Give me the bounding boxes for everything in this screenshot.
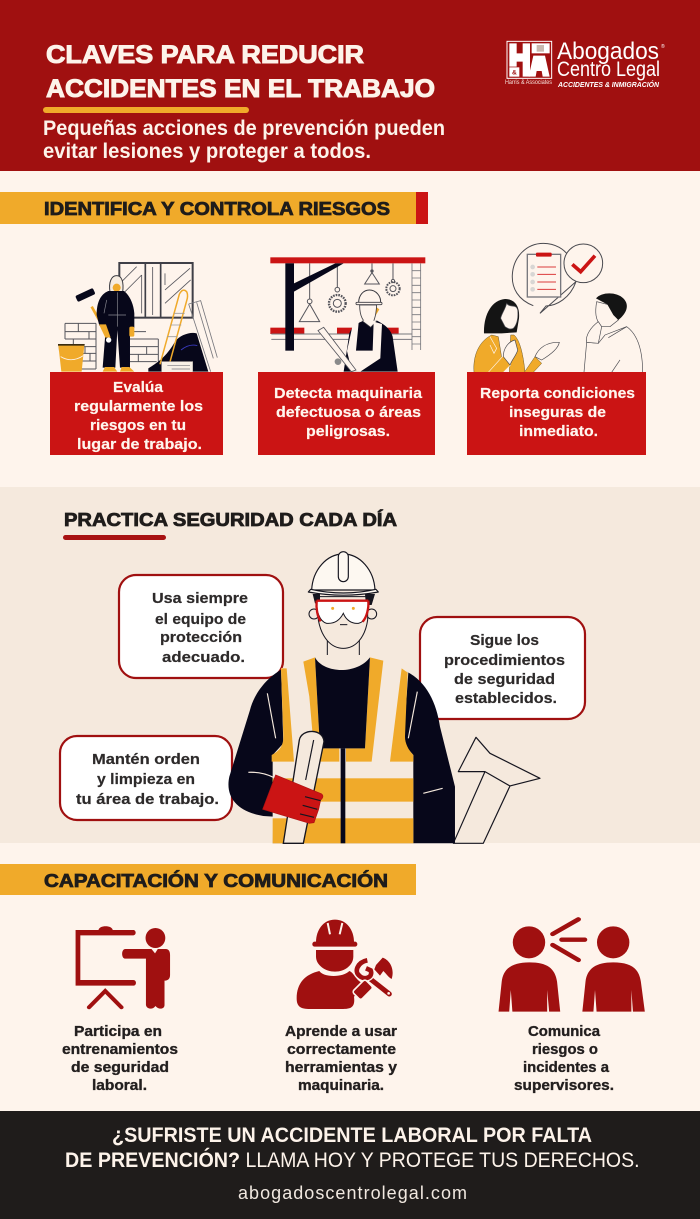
text: entrenamientos: laboral. xyxy=(92,1078,147,1094)
section 1 heading bar xyxy=(0,192,428,224)
text: herramientas: maquinaria. xyxy=(298,1078,384,1094)
logo: & xyxy=(512,69,517,76)
text: entrenamientos xyxy=(62,1024,178,1094)
subtitle: Pequeñas acciones de prevención pueden xyxy=(43,117,445,140)
text: comunica riesgos xyxy=(514,1024,614,1094)
panel: practica seguridad xyxy=(0,487,700,843)
callout: equipo de protección: protección xyxy=(160,629,242,646)
callout: equipo de protección xyxy=(119,575,283,678)
card: evalúa riesgos: lugar de trabajo. xyxy=(77,436,202,453)
callout: procedimientos: establecidos. xyxy=(455,690,557,707)
card: evalúa riesgos: Evalúa xyxy=(113,379,164,396)
illustration: two colleagues talking about a checklist xyxy=(474,243,643,372)
card: evalúa riesgos xyxy=(50,372,223,455)
logo: ACCIDENTES & INMIGRACIÓN xyxy=(557,80,660,89)
card: reporta condiciones: inmediato. xyxy=(519,423,598,440)
red glove xyxy=(263,775,323,823)
icon: worker with tools xyxy=(297,920,393,1009)
woman in yellow jacket xyxy=(474,299,559,372)
card: detecta maquinaria xyxy=(258,372,435,455)
logo: ® xyxy=(661,43,665,50)
section 1 heading bar: IDENTIFICA Y CONTROLA RIESGOS xyxy=(44,198,390,219)
title: CLAVES PARA REDUCIR xyxy=(46,41,364,69)
text: entrenamientos: entrenamientos xyxy=(62,1042,178,1058)
hard hat xyxy=(308,552,378,595)
text: entrenamientos: de seguridad xyxy=(71,1060,169,1076)
call to action xyxy=(65,1124,640,1172)
text: entrenamientos: Participa en xyxy=(74,1024,162,1040)
call to action: LLAMA HOY Y PROTEGE TUS DERECHOS. xyxy=(246,1149,640,1172)
logo xyxy=(505,38,665,89)
icon: two people communicating xyxy=(499,919,645,1012)
rolled plans xyxy=(283,731,324,843)
text: herramientas: Aprende a usar xyxy=(285,1024,397,1040)
header panel xyxy=(0,0,700,171)
section 3 heading bar xyxy=(0,864,416,895)
callout: procedimientos xyxy=(420,617,585,719)
card: detecta maquinaria: peligrosas. xyxy=(306,423,390,440)
call to action: ¿SUFRISTE UN ACCIDENTE LABORAL POR FALTA xyxy=(112,1124,592,1147)
tool: square ruler xyxy=(453,737,540,843)
callout: procedimientos: procedimientos xyxy=(444,652,565,669)
logo: Harris & Associates xyxy=(505,79,552,86)
text: herramientas xyxy=(285,1024,397,1094)
section 2 heading: PRACTICA SEGURIDAD CADA DÍA xyxy=(64,509,397,530)
speech bubbles with checklist xyxy=(512,243,603,313)
subtitle xyxy=(43,117,445,163)
title xyxy=(46,41,435,103)
text: comunica riesgos: incidentes a xyxy=(523,1060,610,1076)
logo: Centro Legal xyxy=(557,58,660,81)
callout: equipo de protección: adecuado. xyxy=(162,649,245,666)
card: reporta condiciones: Reporta condiciones xyxy=(480,385,635,402)
callout: orden y limpieza: y limpieza en xyxy=(97,771,195,788)
text: herramientas: correctamente xyxy=(287,1042,396,1058)
card: evalúa riesgos: regularmente los xyxy=(74,398,203,415)
safety vest xyxy=(273,657,413,843)
card: evalúa riesgos: riesgos en tu xyxy=(90,417,186,434)
footer panel xyxy=(0,1111,700,1219)
section 3 heading bar: CAPACITACIÓN Y COMUNICACIÓN xyxy=(44,870,388,891)
callout: orden y limpieza xyxy=(60,736,232,820)
man thinking xyxy=(584,293,643,372)
card: reporta condiciones xyxy=(467,372,646,455)
illustration: machinery and engineer xyxy=(270,257,425,372)
illustration: safety worker with vest and helmet xyxy=(228,552,540,843)
icon: presenter at board xyxy=(76,926,170,1009)
callout: orden y limpieza: tu área de trabajo. xyxy=(76,791,219,808)
website: abogadoscentrolegal.com xyxy=(238,1183,467,1203)
card: reporta condiciones: inseguras de xyxy=(509,404,606,421)
text: comunica riesgos: riesgos o xyxy=(532,1042,598,1058)
callout: procedimientos: Sigue los xyxy=(470,632,539,649)
dark jacket xyxy=(228,669,455,843)
callout: equipo de protección: Usa siempre xyxy=(152,590,248,607)
jacket highlights xyxy=(248,692,443,793)
text: herramientas: herramientas y xyxy=(285,1060,397,1076)
call to action: DE PREVENCIÓN? xyxy=(65,1148,240,1172)
logo: Abogados xyxy=(557,38,659,65)
title underline xyxy=(43,107,249,113)
text: comunica riesgos: Comunica xyxy=(528,1024,601,1040)
callout: equipo de protección: el equipo de xyxy=(155,611,246,628)
head and goggles xyxy=(309,594,377,655)
illustration: worker in protective suit xyxy=(58,263,217,372)
card: detecta maquinaria: defectuosa o áreas xyxy=(276,404,421,421)
card: detecta maquinaria: Detecta maquinaria xyxy=(274,385,423,402)
callout: orden y limpieza: Mantén orden xyxy=(92,751,200,768)
callout: procedimientos: de seguridad xyxy=(454,671,555,688)
section 2 heading underline xyxy=(63,535,166,540)
subtitle: evitar lesiones y proteger a todos. xyxy=(43,140,371,163)
title: ACCIDENTES EN EL TRABAJO xyxy=(46,75,435,103)
text: comunica riesgos: supervisores. xyxy=(514,1078,614,1094)
